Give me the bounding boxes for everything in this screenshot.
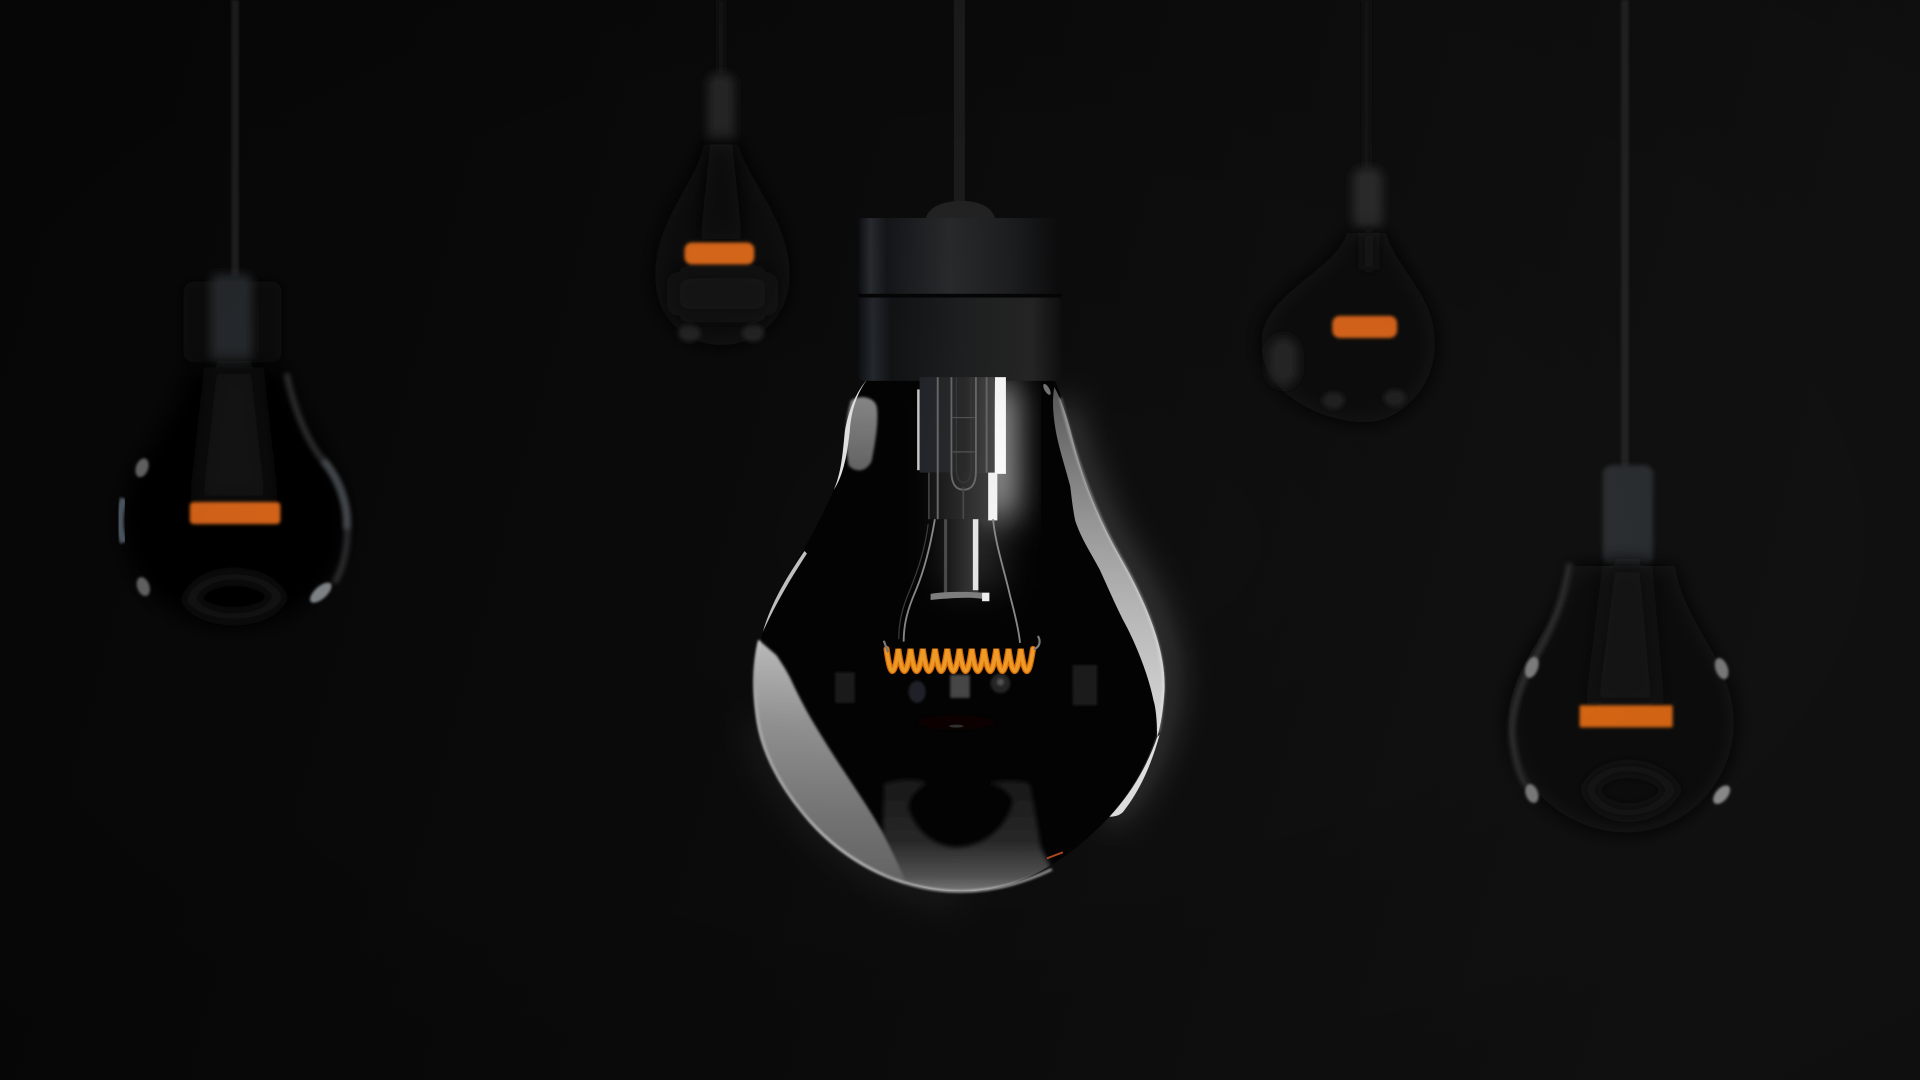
- filament support wires: [899, 519, 1020, 643]
- inner stem: bright highlights: [973, 377, 1006, 590]
- bulb: far right, blurred: [1509, 0, 1734, 833]
- glass reflection: upper left patch: [846, 397, 877, 470]
- bulb: top middle, blurred: [655, 0, 790, 345]
- faint reflected squares and dots: [835, 665, 1097, 730]
- glass reflection: big lower left sweep: [755, 640, 906, 883]
- lamp holder: dome: [926, 201, 996, 219]
- bulb: far left, blurred: [120, 0, 349, 627]
- bulb: main centre: [754, 0, 1165, 894]
- bulb: top right, blurred: [1261, 0, 1435, 422]
- inner stem: lower cylinder: [943, 519, 978, 593]
- inner stem: pinch base: [931, 592, 989, 601]
- small neck highlight: [1042, 383, 1052, 396]
- glass reflection: left shoulder rim: [763, 551, 807, 632]
- glass reflection: upper left rim: [834, 378, 868, 490]
- glass envelope: [755, 380, 1165, 891]
- outer glow: [758, 404, 1165, 894]
- filament glow: [684, 242, 754, 264]
- inner stem: glow: [943, 382, 1014, 588]
- lamp holder: upper ring: [858, 218, 1060, 294]
- reflection of cap in bottom of glass: [883, 780, 1052, 894]
- power cord: [954, 0, 965, 203]
- filament glow: [1332, 316, 1397, 338]
- scene: hanging light bulbs: [118, 0, 1733, 906]
- filament glow: [190, 502, 280, 524]
- glass reflection: right crescent: [1053, 387, 1165, 737]
- glass reflection: lower right rim: [1109, 735, 1160, 817]
- filament glow: [1580, 705, 1673, 727]
- filament coil: [884, 637, 1040, 671]
- lamp holder: lower ring: [858, 298, 1063, 381]
- orange streak in glass: [1047, 852, 1063, 858]
- inner stem: glass tube: [917, 377, 994, 519]
